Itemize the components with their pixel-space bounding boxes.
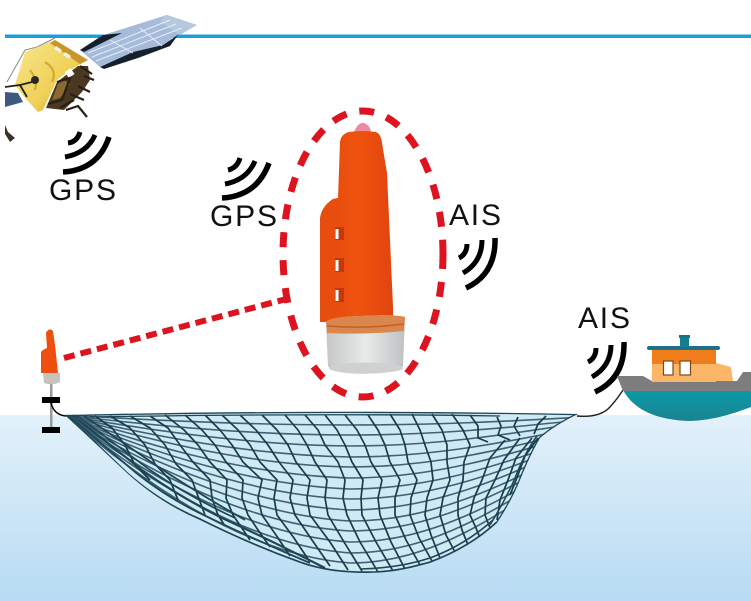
icon: GPS signal waves (beacon) — [222, 158, 269, 198]
horizon blue line — [5, 34, 751, 38]
label: GPS near beacon: GPS — [210, 200, 279, 233]
net rows — [65, 415, 600, 563]
icon: AIS signal waves (beacon) — [459, 238, 495, 288]
callout: dashed ellipse around beacon — [283, 111, 443, 397]
icon: GPS signal waves (satellite) — [63, 132, 109, 172]
callout: dashed connector line — [64, 298, 290, 358]
fishing net — [65, 412, 600, 573]
label: GPS near satellite: GPS — [49, 174, 118, 207]
label: AIS near beacon: AIS — [449, 199, 503, 232]
icon: small beacon on float pole — [41, 329, 66, 433]
water background — [0, 415, 751, 601]
icon: fishing boat — [577, 335, 751, 421]
icon: AIS signal waves (boat) — [588, 342, 624, 392]
icon: satellite — [5, 15, 197, 142]
net columns — [95, 414, 546, 572]
icon: large orange beacon — [320, 123, 405, 374]
net edge bundle — [65, 412, 578, 573]
label: AIS near boat: AIS — [578, 302, 632, 335]
